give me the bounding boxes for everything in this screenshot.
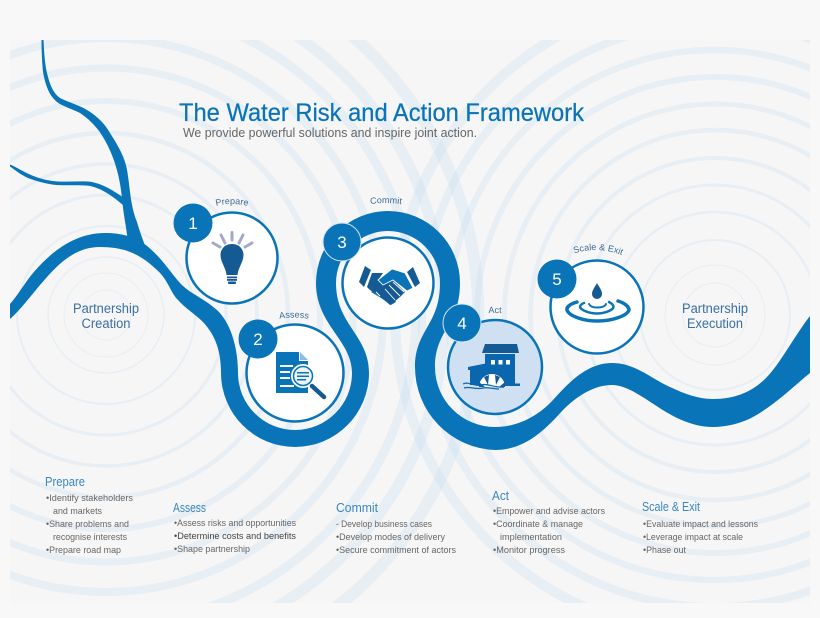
icon: water mill <box>463 344 520 389</box>
icon: document and magnifier <box>276 352 324 397</box>
icon: handshake <box>359 266 420 305</box>
label: commit: Commit <box>370 197 402 204</box>
text block: assess <box>173 500 296 555</box>
icon: light bulb <box>213 232 252 284</box>
text block: commit: - Develop business cases <box>336 519 432 530</box>
step 5: scale and exit <box>538 244 645 355</box>
text block: assess: •Assess risks and opportunities <box>174 518 296 529</box>
badge 4: 4 <box>457 314 467 333</box>
badge 1: 1 <box>188 214 198 233</box>
text block: scale and exit: Scale & Exit <box>642 499 700 514</box>
text block: scale and exit: •Phase out <box>643 545 686 556</box>
text block: prepare: •Share problems and <box>46 519 129 530</box>
circle 5 <box>550 260 644 354</box>
river small tributary <box>10 164 124 206</box>
label: prepare: Prepare <box>216 199 248 206</box>
partnership execution label: Partnership <box>682 301 748 316</box>
partnership execution label <box>682 301 748 331</box>
circle 1 <box>186 212 278 304</box>
icon: water drop with ripples <box>567 283 629 321</box>
text block: prepare: Prepare <box>45 474 85 489</box>
badge 2: 2 <box>253 330 263 349</box>
text block: prepare: and markets <box>53 506 102 517</box>
text block: commit: •Develop modes of delivery <box>336 532 445 543</box>
text block: assess: •Shape partnership <box>174 544 250 555</box>
label: scale and exit: Scale & Exit <box>574 244 624 256</box>
text block: prepare <box>45 474 133 556</box>
text block: assess: •Determine costs and benefits <box>174 531 296 542</box>
label: assess: Assess <box>280 312 309 319</box>
circle 3 <box>342 238 434 328</box>
label: act: Act <box>488 306 502 314</box>
text block: commit: Commit <box>336 500 378 515</box>
partnership execution label: Execution <box>687 316 743 331</box>
subtitle: We provide powerful solutions and inspire joint action. <box>183 126 477 140</box>
river main tributary <box>42 40 146 248</box>
badge 5: 5 <box>552 270 562 289</box>
text block: prepare: •Identify stakeholders <box>46 493 133 504</box>
partnership creation label: Partnership <box>73 301 139 316</box>
step 1: prepare <box>174 199 279 305</box>
step 4: act <box>442 304 544 416</box>
circle 2 <box>246 324 344 422</box>
river ribbon <box>10 211 810 450</box>
text block: act: •Monitor progress <box>493 545 565 556</box>
text block: assess: Assess <box>173 500 206 515</box>
text block: prepare: recognise interests <box>53 532 127 543</box>
text block: act: •Coordinate & manage <box>493 519 583 530</box>
step 2: assess <box>238 312 345 423</box>
circle 4 <box>448 320 542 414</box>
text block: act: implementation <box>500 532 562 543</box>
text block: prepare: •Prepare road map <box>46 545 121 556</box>
text block: act <box>492 488 605 556</box>
text block: commit: •Secure commitment of actors <box>336 545 456 556</box>
badge 3: 3 <box>337 233 347 252</box>
text block: commit <box>336 500 456 556</box>
text block: scale and exit: •Leverage impact at scale <box>643 532 743 543</box>
step 3: commit <box>322 197 435 330</box>
partnership creation label <box>73 301 139 331</box>
partnership creation label: Creation <box>82 316 130 331</box>
text block: scale and exit: •Evaluate impact and lessons <box>643 519 758 530</box>
text block: act: •Empower and advise actors <box>493 506 605 517</box>
title: The Water Risk and Action Framework <box>179 99 584 127</box>
text block: act: Act <box>492 488 509 503</box>
text block: scale and exit <box>642 499 758 556</box>
